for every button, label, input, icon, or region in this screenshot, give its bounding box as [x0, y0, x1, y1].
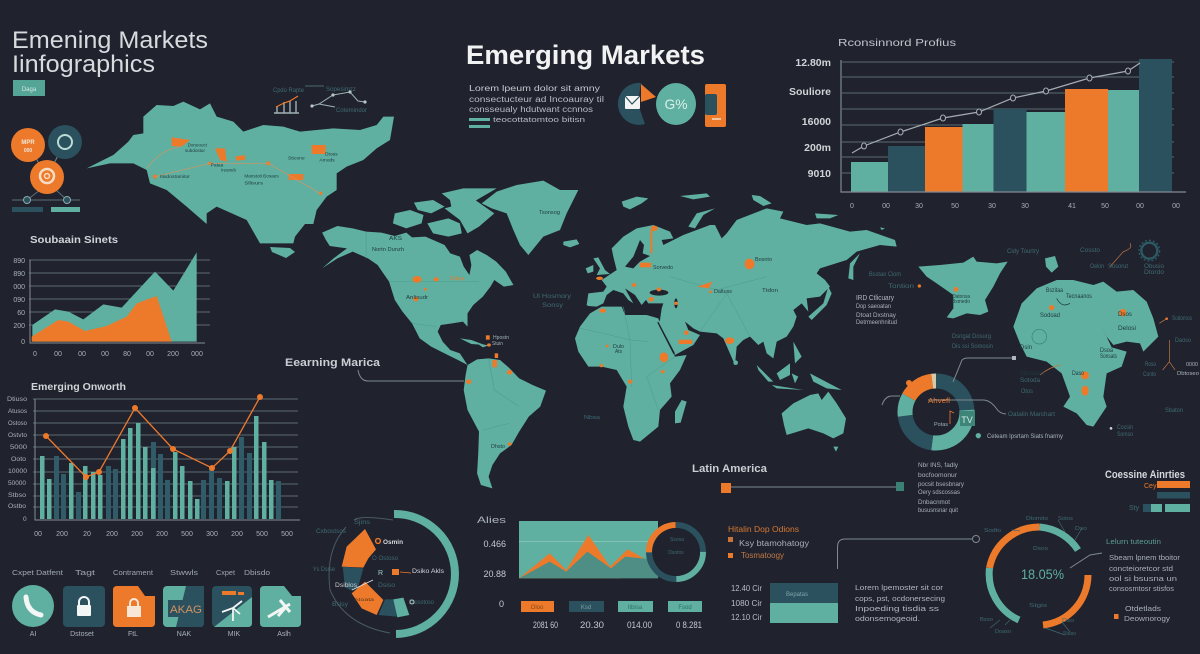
chart: right donut with connectors: Potas: [934, 422, 948, 428]
map labels: world: Tsonsog: [539, 210, 560, 216]
map labels: world: Bosnto: [755, 257, 772, 263]
map: top-left region: Doneouct: [188, 143, 208, 148]
icon: orange folder lock: [113, 586, 155, 627]
chart heading: Soubaain Sinets: [30, 235, 118, 246]
text labels: right regions: Sotoda: [1020, 378, 1041, 384]
label: Latin America with connector: Latin America: [692, 463, 768, 475]
map: Asian islands: [757, 253, 860, 390]
y-axis labels: 200m: [804, 142, 831, 154]
y-axis labels: 890: [13, 258, 25, 265]
line series: [43, 394, 263, 480]
map labels: world: Ttdon: [762, 288, 778, 294]
text labels: right regions: Dtoat Dxstnay: [856, 312, 897, 319]
legend: Coessine Ainrties: Cey: [1144, 483, 1157, 490]
chart: area chart: [13, 235, 210, 358]
y-axis labels: 0: [23, 516, 27, 523]
map labels: world: Sorvedo: [653, 265, 673, 271]
x-axis labels: 500: [281, 531, 293, 538]
text block: intro: Lorem lpeum dolor sit amny: [469, 83, 601, 93]
chart: bottom segmented donut: Ys Dsrse: [313, 567, 336, 573]
text labels: right regions: Bszitaa: [1046, 288, 1064, 294]
mini charts: top centre-left: [273, 86, 367, 114]
map labels: world: [372, 210, 778, 450]
map markers: right regions: [918, 284, 1168, 396]
x-axis labels: [850, 203, 1180, 210]
chart: gauge ring: Bsso: [980, 617, 993, 623]
legend: Coessine Ainrties: Sty: [1129, 505, 1140, 512]
button: teal tag: Daga: [22, 87, 37, 93]
y-axis labels: Dtiuso: [7, 396, 27, 403]
chart heading: Rconsinnord Profius: [838, 37, 956, 49]
x-axis labels: 00: [1172, 203, 1180, 210]
map labels: world: Dhsto: [491, 444, 505, 450]
y-axis labels: 9010: [808, 168, 831, 180]
y-axis labels: Ostoso: [8, 420, 27, 427]
chart: gauge ring: Doaso: [995, 629, 1011, 635]
chart: gauge ring: Sotos: [1058, 516, 1073, 522]
x-axis labels: 00: [54, 351, 62, 358]
x-axis labels: 200: [56, 531, 68, 538]
chart: right donut with connectors: Ahvefl: [928, 398, 950, 405]
chart: bottom segmented donut: Cxbostsos: [316, 529, 346, 535]
x-axis labels: 200: [106, 531, 118, 538]
text labels: right regions: Sbaton: [1165, 408, 1183, 414]
text labels: right regions: Sodomos: [1172, 316, 1192, 322]
top labels: [12, 570, 270, 577]
chart: bottom segmented donut: Atoata: [354, 597, 375, 602]
text labels: right regions: Sonsats: [1100, 354, 1117, 360]
x-axis labels: 00: [78, 351, 86, 358]
icon: split tile with AKAG: AKAG: [170, 604, 202, 616]
y-axis labels: 000: [13, 284, 25, 291]
text block: gauge description: ool si bsusna un: [1109, 574, 1177, 583]
chart: bottom centre area and donut: Dsotos: [668, 550, 684, 556]
map: top-left region: Amods: [319, 157, 335, 162]
map: top-left region: Sttoone: [288, 155, 305, 160]
text labels: right regions: Detrmeenhnitud: [856, 319, 897, 326]
legend boxes: Itbisa: [628, 605, 643, 611]
text labels: right regions: Conto: [1143, 372, 1157, 378]
x-axis labels: 200: [167, 351, 179, 358]
y-axis labels: Ostbo: [8, 503, 26, 510]
map: right small region: [918, 257, 1008, 318]
text labels: right regions: Otos: [1021, 389, 1033, 395]
map labels: world: Hpostn: [493, 335, 509, 341]
text block: gauge description: Sbeam lpnem tboitor: [1109, 553, 1181, 562]
bottom labels: FtL: [128, 631, 138, 638]
x-axis labels: 30: [988, 203, 996, 210]
text labels: right regions: Oatonsa: [952, 294, 971, 300]
top labels: Dbisdo: [244, 570, 270, 577]
text block: gauge description: consosmtosr stisfos: [1109, 584, 1174, 593]
map: top-left region: Dtoas: [325, 151, 338, 156]
axis labels: [483, 539, 506, 609]
chart: gauge ring: Sodto: [984, 528, 1001, 534]
map labels: world: Ul Hosmory: [533, 293, 572, 300]
text labels: right regions: Roso: [1145, 362, 1157, 368]
chart: bottom centre area and donut: Ssosa: [670, 537, 684, 543]
x-axis labels: 30: [915, 203, 923, 210]
chart: bottom segmented donut: Bsisy: [332, 602, 348, 608]
text block: bottom paragraph: odonsemogeoid.: [855, 614, 920, 623]
chart: gauge ring: Dtomito: [1026, 516, 1048, 522]
chart: gauge ring: Dso: [1062, 618, 1074, 624]
x-axis labels: 41: [1068, 203, 1076, 210]
top labels: Contrament: [113, 570, 153, 577]
top labels: Cxpet: [216, 570, 235, 577]
legend boxes: Fsod: [678, 605, 692, 611]
text labels: right regions: Cidy Tourtry: [1007, 249, 1039, 255]
value labels: 0 8.281: [676, 620, 702, 630]
text labels: right regions: Dsos: [1118, 312, 1132, 318]
text labels: right regions: Dtordo: [1144, 270, 1165, 276]
icons: pie with envelope, percent badge, phone: [618, 83, 726, 127]
value labels: 2081 60: [533, 620, 558, 630]
text block: gauge description: concteioretcor std: [1109, 564, 1173, 573]
icon: lock tile: [63, 586, 105, 627]
text labels: right regions: Sodoad: [1040, 313, 1060, 319]
text block: bottom paragraph: Inpoeding tisdia ss: [855, 604, 939, 613]
mini charts: top centre-left: Cotemindor: [336, 108, 367, 114]
chart: right donut with connectors: Oatalin Marchart: [1008, 412, 1055, 418]
bars: [851, 59, 1172, 192]
y-axis labels: Souliore: [789, 86, 831, 98]
x-axis labels: 0: [33, 351, 37, 358]
text labels: right regions: Daoso: [1175, 338, 1192, 344]
y-axis labels: Ostvto: [8, 432, 27, 439]
chart: bottom segmented donut: Sjins: [354, 520, 370, 526]
text labels: right regions: Tecnaanos: [1066, 294, 1092, 300]
bars: teal series: [40, 416, 274, 519]
text block: centre-right note: bocfoomonur: [918, 472, 958, 479]
text labels: right regions: Delosi: [1118, 326, 1136, 332]
icon: split tile with AKAG: [163, 586, 204, 627]
label: Latin America with connector: [692, 463, 904, 493]
text block: intro: consectucteur ad Incoauray til: [469, 95, 604, 104]
chart: gauge ring: 18.05%: [1021, 566, 1064, 582]
map markers: top-left region: [153, 137, 326, 195]
map: world: [322, 181, 897, 488]
text block: centre-right note: Dnbacnmot: [918, 499, 950, 506]
text block: intro: [469, 83, 604, 128]
chart: gauge ring: Dsos: [1033, 546, 1048, 552]
chart: right donut with connectors: Ceteam Ipsrtam Siats fnarmy: [987, 433, 1064, 440]
chart: stacked block with labels: Bepatas: [786, 592, 808, 598]
map labels: world: Daltuss: [714, 289, 733, 295]
y-axis labels: Atusos: [8, 408, 28, 415]
y-axis labels: 5000: [10, 444, 27, 451]
text labels: right regions: Daso: [1072, 371, 1085, 377]
map: top-left region: Ireaneb: [221, 168, 237, 173]
map labels: world: Stuin: [492, 341, 503, 347]
text block: bottom paragraph: cops, pst, ocdonersecing: [855, 594, 945, 603]
legend: Coessine Ainrties: [1105, 469, 1190, 512]
x-axis labels: 20: [83, 531, 91, 538]
chart: gauge ring: Stgis: [1029, 603, 1047, 609]
x-axis labels: 80: [123, 351, 131, 358]
chart: bottom segmented donut: Dtosotoso: [409, 600, 435, 606]
text labels: right regions: Tontion: [888, 284, 914, 290]
text labels: right regions: [856, 248, 1199, 438]
top labels: Stwwls: [170, 570, 199, 577]
text block: intro: teocottatomtoo bitisn: [493, 115, 585, 124]
chart: top-right bar and line chart: [789, 37, 1186, 210]
chart: bottom segmented donut: R: [378, 570, 383, 577]
text labels: right regions: Dop saeoatan: [856, 303, 891, 310]
x-axis labels: 00: [1136, 203, 1144, 210]
map markers: world: [412, 226, 755, 446]
bottom labels: NAK: [177, 631, 192, 638]
x-axis labels: 00: [882, 203, 890, 210]
text labels: right regions: Bsstao Ciom: [869, 272, 901, 278]
map: top-left region: subdostur: [185, 148, 206, 153]
bars: dark series: [54, 437, 281, 519]
map labels: world: Nortn Dunzh: [372, 247, 404, 253]
text labels: right regions: Obusio: [1144, 264, 1165, 270]
y-axis labels: Stbso: [8, 492, 26, 499]
text block: centre-right note: Oery sdscossas: [918, 489, 961, 496]
chart heading: Emerging Onworth: [31, 382, 126, 393]
legend: orange options list: Hitalin Dop Odions: [728, 525, 799, 534]
legend: orange options list: [728, 525, 809, 560]
map labels: world: AKS: [389, 236, 403, 242]
mini charts: top centre-left: Cpdo Rapte: [273, 88, 305, 94]
text labels: right regions: Dis ssi Somosin: [952, 344, 993, 350]
panel: right-side region maps: [856, 240, 1199, 438]
y-axis labels: 60: [17, 310, 25, 317]
map: Madagascar and Australia: [675, 392, 846, 452]
x-axis labels: 200: [131, 531, 143, 538]
chart: stacked block with labels: 12.10 Cir: [731, 613, 762, 622]
title: left heading: [12, 27, 208, 78]
text block: gauge description: Deownorogy: [1124, 614, 1170, 623]
text block: centre-right note: bususnsnar quit: [918, 507, 958, 514]
chart: stacked block with labels: [731, 583, 838, 623]
map labels: world: Dulo: [613, 344, 624, 350]
map: top-left region: Manstoti Bosaes: [244, 174, 279, 179]
legend: Coessine Ainrties: Coessine Ainrties: [1105, 469, 1185, 481]
x-axis labels: 00: [146, 351, 154, 358]
text labels: right regions: Dsin: [1020, 345, 1032, 351]
text block: intro: consseualy hdutwant ccnnos: [469, 105, 593, 114]
text block: centre-right note: pocsit bsesbnary: [918, 481, 965, 488]
map: top-left region: Sllisurs: [244, 181, 263, 186]
icon cluster: three connected circles: MPR: [21, 140, 35, 146]
bottom labels: MIK: [228, 631, 241, 638]
x-axis labels: 500: [256, 531, 268, 538]
bottom labels: [30, 631, 291, 638]
text labels: right regions: IRD Ctlicuary: [856, 295, 894, 302]
map: top-left region: [87, 102, 394, 258]
axis labels: 20.88: [483, 569, 506, 579]
icon: wind turbine tile: [212, 586, 252, 627]
text block: bottom paragraph: Lorem lpemoster sit cor: [855, 583, 944, 592]
chart: bottom segmented donut: O Ostoso: [372, 556, 399, 562]
label: Emerging Marica with connector: [285, 357, 464, 381]
text labels: right regions: Dsoa: [1100, 348, 1114, 354]
icon cluster: three connected circles: [11, 125, 82, 212]
chart: stacked block with labels: 12.40 Cir: [731, 584, 762, 593]
connector: to gauge: [838, 539, 972, 569]
text labels: right regions: Cossto: [1080, 248, 1101, 254]
text labels: right regions: Sbsoson: [1020, 371, 1044, 377]
text labels: right regions: Sosorut: [1108, 264, 1128, 270]
legend boxes: Oloo: [531, 605, 544, 611]
chart: gauge ring: Staso: [1063, 631, 1076, 637]
y-axis labels: 200: [13, 323, 25, 330]
x-axis labels: 300: [206, 531, 218, 538]
x-axis labels: 500: [181, 531, 193, 538]
legend: orange options list: Tosmatoogy: [741, 551, 784, 560]
text block: gauge description: [1106, 537, 1181, 623]
y-axis labels: 890: [13, 271, 25, 278]
icon row: labelled tiles: [12, 570, 301, 638]
x-axis labels: 00: [34, 531, 42, 538]
map: Africa: [575, 307, 687, 442]
y-axis labels: 10000: [8, 468, 27, 475]
y-axis labels: 16000: [802, 116, 831, 128]
text labels: right regions: 0000: [1186, 362, 1198, 368]
chart: growth bars and line: [7, 382, 300, 538]
top labels: Tagt: [75, 570, 95, 577]
button: teal tag: [13, 80, 45, 96]
map: right large region: [1013, 280, 1158, 427]
value labels: 014.00: [627, 620, 652, 630]
x-axis labels: 200: [231, 531, 243, 538]
chart: gauge ring: Dso: [1075, 526, 1087, 532]
x-axis labels: 00: [101, 351, 109, 358]
chart: bottom centre area and donut: [477, 515, 703, 630]
title: left heading: Emening Markets: [12, 27, 208, 54]
text block: bottom paragraph: [855, 583, 945, 623]
top labels: Cxpet Datfent: [12, 570, 63, 577]
y-axis labels: [789, 57, 831, 180]
bottom labels: Dstoset: [70, 631, 94, 638]
text block: centre-right note: [918, 462, 965, 514]
donut: [649, 525, 703, 579]
icon: phone: [12, 585, 54, 627]
map: top-left region: Itisdostamitor: [160, 174, 191, 179]
text labels: right regions: Oelon: [1090, 264, 1104, 270]
y-axis labels: [7, 396, 28, 523]
chart: bottom segmented donut: Dsiko Akls: [412, 568, 445, 575]
heading: Emerging Markets: Emerging Markets: [466, 40, 705, 70]
label: Emerging Marica with connector: Eearning Marica: [285, 357, 381, 369]
text block: gauge description: Lelurn tuteoutin: [1106, 537, 1161, 546]
bottom labels: AI: [30, 631, 36, 638]
map labels: world: Ats: [615, 349, 622, 355]
text labels: right regions: Dsngat Dosurg: [952, 334, 991, 340]
x-axis labels: [34, 531, 293, 538]
map: Eurasia: [587, 208, 897, 365]
map: British Isles: [586, 257, 610, 275]
map labels: world: Sonsy: [542, 302, 564, 309]
icon: teal folder with plane: [260, 586, 301, 627]
chart: right donut with connectors: [882, 356, 1064, 443]
chart: stacked block with labels: 1080 Cir: [731, 599, 762, 608]
x-axis labels: 000: [191, 351, 203, 358]
y-axis labels: 0: [21, 339, 25, 346]
mini charts: top centre-left: Sopesimzz: [326, 87, 356, 93]
chart: right donut with connectors: TV: [961, 415, 973, 425]
title: left heading: Iinfographics: [12, 51, 155, 78]
legend boxes: [521, 601, 702, 612]
x-axis labels: 200: [156, 531, 168, 538]
y-axis labels: 090: [13, 297, 25, 304]
text labels: right regions: Dbtoseo: [1177, 371, 1199, 377]
map labels: world: Dutya: [450, 276, 465, 282]
text block: gauge description: Otdetlads: [1125, 604, 1161, 613]
chart: bottom segmented donut: Osmin: [383, 540, 403, 546]
value labels: [533, 620, 702, 630]
map labels: world: Nbsa: [584, 415, 601, 421]
x-axis labels: 50: [951, 203, 959, 210]
x-axis labels: 30: [1021, 203, 1029, 210]
map labels: world: Anlisudr: [406, 295, 428, 301]
map: top-left region: Pataa: [211, 163, 224, 168]
icon: gear: [1139, 240, 1160, 261]
axis labels: 0: [499, 599, 504, 609]
y-axis labels: 50000: [8, 480, 26, 487]
x-axis labels: [33, 351, 203, 358]
x-axis labels: 50: [1101, 203, 1109, 210]
text labels: right regions: Cocsin: [1117, 425, 1133, 431]
bottom labels: Aslh: [277, 631, 291, 638]
chart: bottom segmented donut: Dsiblos: [335, 582, 358, 589]
x-axis labels: 0: [850, 203, 854, 210]
trend line: [852, 63, 1140, 153]
text block: centre-right note: Nbr INS, fadly: [918, 462, 959, 469]
chart: bottom centre area and donut: Alies: [477, 515, 507, 525]
value labels: 20.30: [580, 620, 604, 630]
legend: orange options list: Ksy btamohatogy: [739, 539, 809, 548]
text labels: right regions: Somso: [1117, 432, 1134, 438]
chart: bottom segmented donut: Dsiso: [378, 583, 396, 589]
y-axis labels: Ooto: [11, 456, 26, 463]
chart: gauge ring: [972, 516, 1102, 637]
legend boxes: Ksd: [581, 605, 591, 611]
map: Greenland and arctic islands: [442, 181, 885, 255]
y-axis labels: 12.80m: [795, 57, 831, 69]
y-axis labels: [13, 258, 25, 346]
icons: pie with envelope, percent badge, phone: G%: [664, 96, 688, 112]
icon cluster: three connected circles: 000: [24, 148, 32, 154]
axis labels: 0.466: [483, 539, 506, 549]
text labels: right regions: Bsmedo: [952, 299, 970, 305]
chart: bottom segmented donut: [313, 514, 455, 634]
